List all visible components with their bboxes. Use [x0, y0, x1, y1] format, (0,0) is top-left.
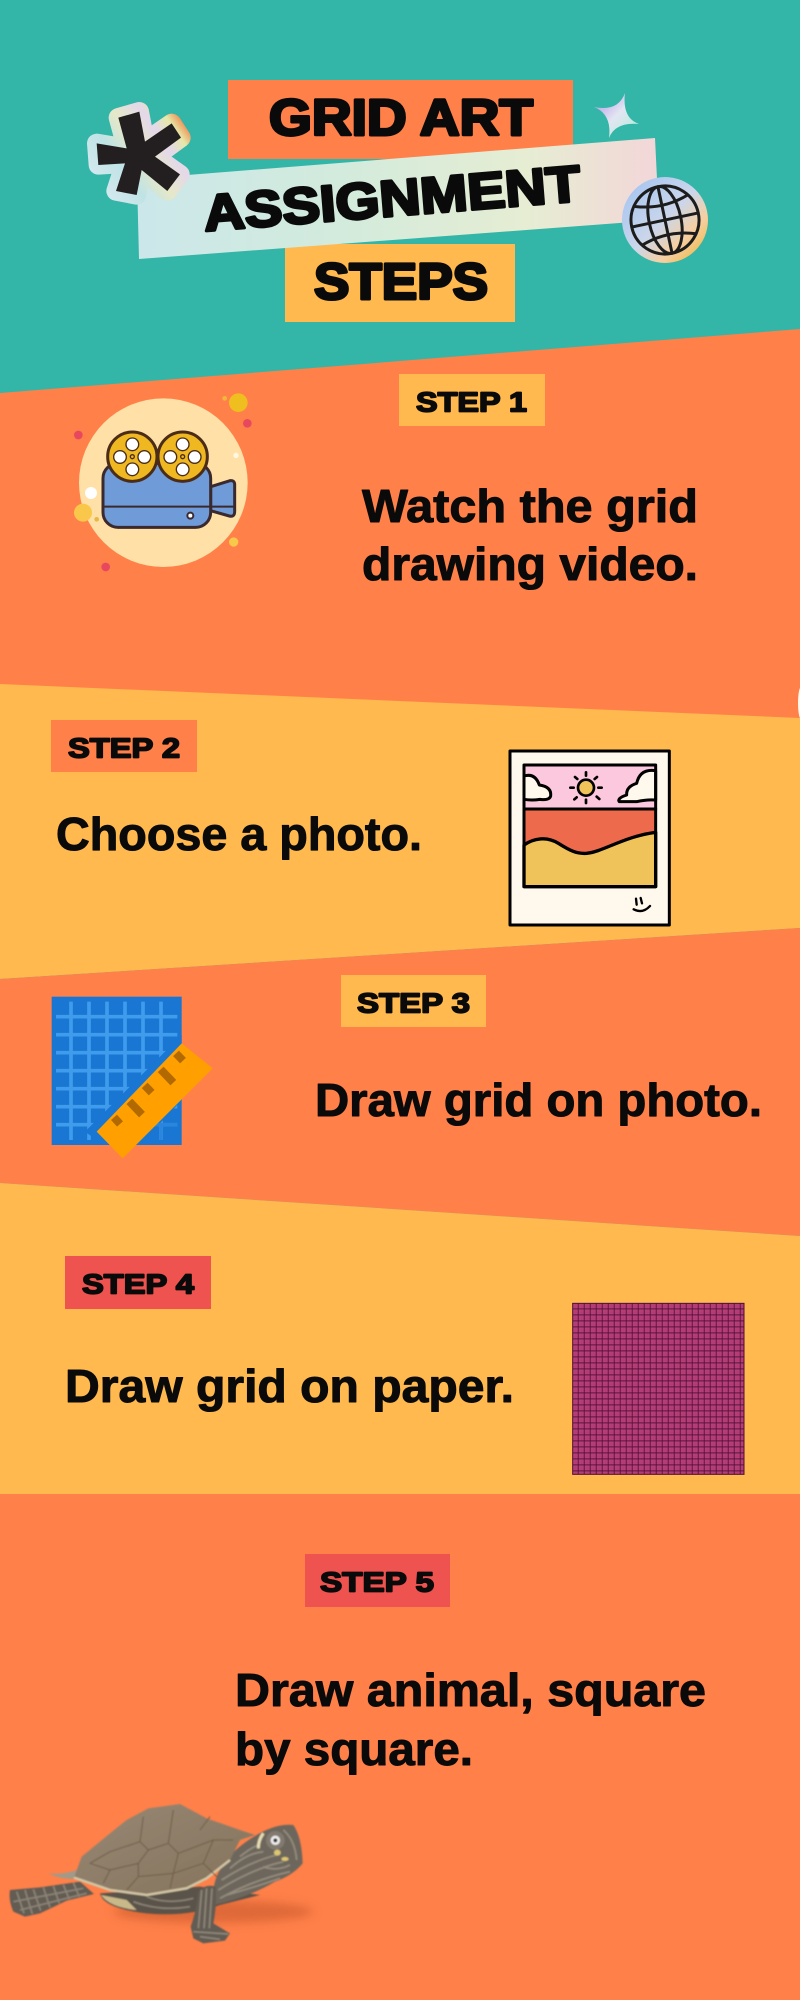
icon: globe sticker	[622, 177, 708, 263]
label: step 3	[341, 975, 486, 1027]
panel: title	[97, 80, 708, 322]
heading: assignment banner	[137, 138, 659, 259]
label: step 4: STEP 4	[82, 1268, 194, 1300]
label: step 1: STEP 1	[416, 386, 527, 418]
decoration: white edge sliver	[798, 687, 800, 719]
text: step 1 instruction: drawing video.	[362, 538, 698, 590]
icon: asterisk sticker	[97, 112, 181, 195]
heading: steps: STEPS	[314, 253, 488, 310]
text: step 4 instruction: Draw grid on paper.	[65, 1360, 514, 1412]
section background	[0, 684, 800, 979]
icon: grid paper and ruler	[52, 997, 213, 1158]
text: step 2 instruction: Choose a photo.	[56, 808, 422, 860]
heading: steps	[285, 244, 515, 322]
label: step 2	[51, 720, 197, 772]
section background	[0, 928, 800, 1236]
panel: step 2	[0, 684, 800, 979]
text: step 5 instruction: Draw animal, square	[235, 1664, 706, 1716]
section background	[0, 329, 800, 720]
text: step 1 instruction	[362, 480, 698, 590]
text: step 5 instruction: by square.	[235, 1723, 473, 1775]
label: step 5: STEP 5	[320, 1566, 434, 1598]
panel: step 3	[0, 928, 800, 1236]
label: step 1	[399, 374, 545, 426]
label: step 2: STEP 2	[68, 732, 180, 764]
icon: purple grid	[573, 1303, 744, 1474]
icon: turtle	[10, 1804, 313, 1943]
text: step 5 instruction	[235, 1664, 706, 1775]
heading: grid art: GRID ART	[269, 89, 533, 146]
label: step 5	[305, 1554, 450, 1607]
label: step 4	[65, 1256, 211, 1309]
heading: assignment banner: ASSIGNMENT	[201, 155, 583, 242]
panel: step 5	[0, 1494, 800, 2000]
section background	[0, 1494, 800, 2000]
text: step 1 instruction: Watch the grid	[362, 480, 698, 532]
panel: step 1	[0, 329, 800, 720]
text: step 3 instruction: Draw grid on photo.	[315, 1074, 762, 1126]
panel: step 4	[0, 1183, 800, 1494]
section background	[0, 1183, 800, 1494]
label: step 3: STEP 3	[357, 988, 470, 1018]
icon: film camera	[74, 393, 252, 571]
icon: sparkle	[594, 93, 639, 138]
icon: polaroid photo	[510, 751, 669, 925]
heading: grid art	[228, 80, 573, 159]
